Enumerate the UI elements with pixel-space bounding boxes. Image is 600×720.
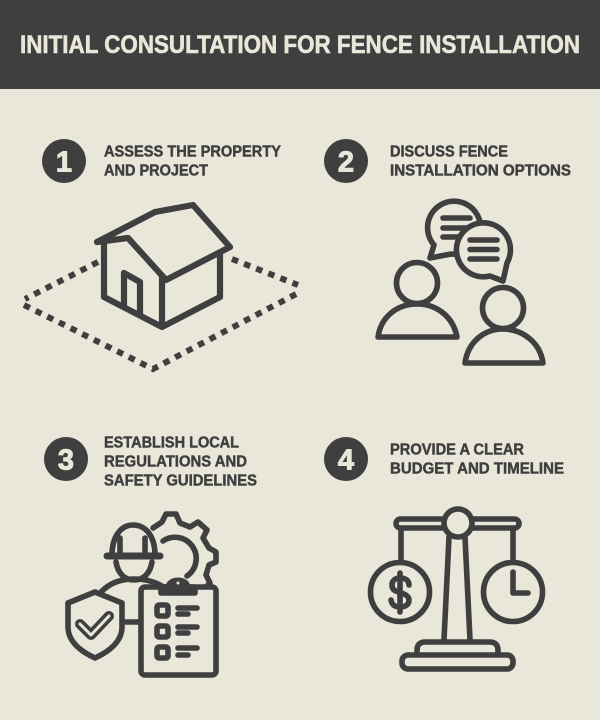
step 3 heading bbox=[104, 434, 257, 490]
icon: worker, gear, shield and checklist bbox=[68, 514, 216, 675]
step 2 heading: DISCUSS FENCE bbox=[390, 144, 508, 160]
step 2 heading bbox=[390, 144, 571, 180]
step 1 number badge bbox=[42, 139, 86, 183]
step 1 heading: AND PROJECT bbox=[104, 162, 208, 180]
step 1 number badge: 1 bbox=[56, 146, 72, 178]
step 4 heading: BUDGET AND TIMELINE bbox=[390, 460, 564, 478]
icon: balance scale weighing money and time bbox=[370, 509, 542, 669]
step 2 number badge bbox=[324, 139, 368, 183]
step 3 number badge: 3 bbox=[58, 444, 74, 476]
step 4 number badge: 4 bbox=[338, 444, 354, 476]
step 2 number badge: 2 bbox=[338, 146, 354, 178]
step 4 heading bbox=[390, 442, 564, 478]
step 3 heading: SAFETY GUIDELINES bbox=[104, 472, 257, 490]
step 1 heading: ASSESS THE PROPERTY bbox=[104, 144, 282, 160]
step 3 heading: REGULATIONS AND bbox=[104, 454, 247, 470]
step 4 number badge bbox=[324, 437, 368, 481]
step 1 heading bbox=[104, 144, 282, 180]
icon: two people talking with speech bubbles bbox=[378, 201, 543, 363]
step 2 heading: INSTALLATION OPTIONS bbox=[390, 162, 571, 180]
icon: house on dotted property outline bbox=[24, 205, 300, 369]
header band with title bbox=[0, 0, 600, 89]
step 3 heading: ESTABLISH LOCAL bbox=[104, 434, 239, 452]
step 3 number badge bbox=[44, 437, 88, 481]
step 4 heading: PROVIDE A CLEAR bbox=[390, 442, 524, 458]
